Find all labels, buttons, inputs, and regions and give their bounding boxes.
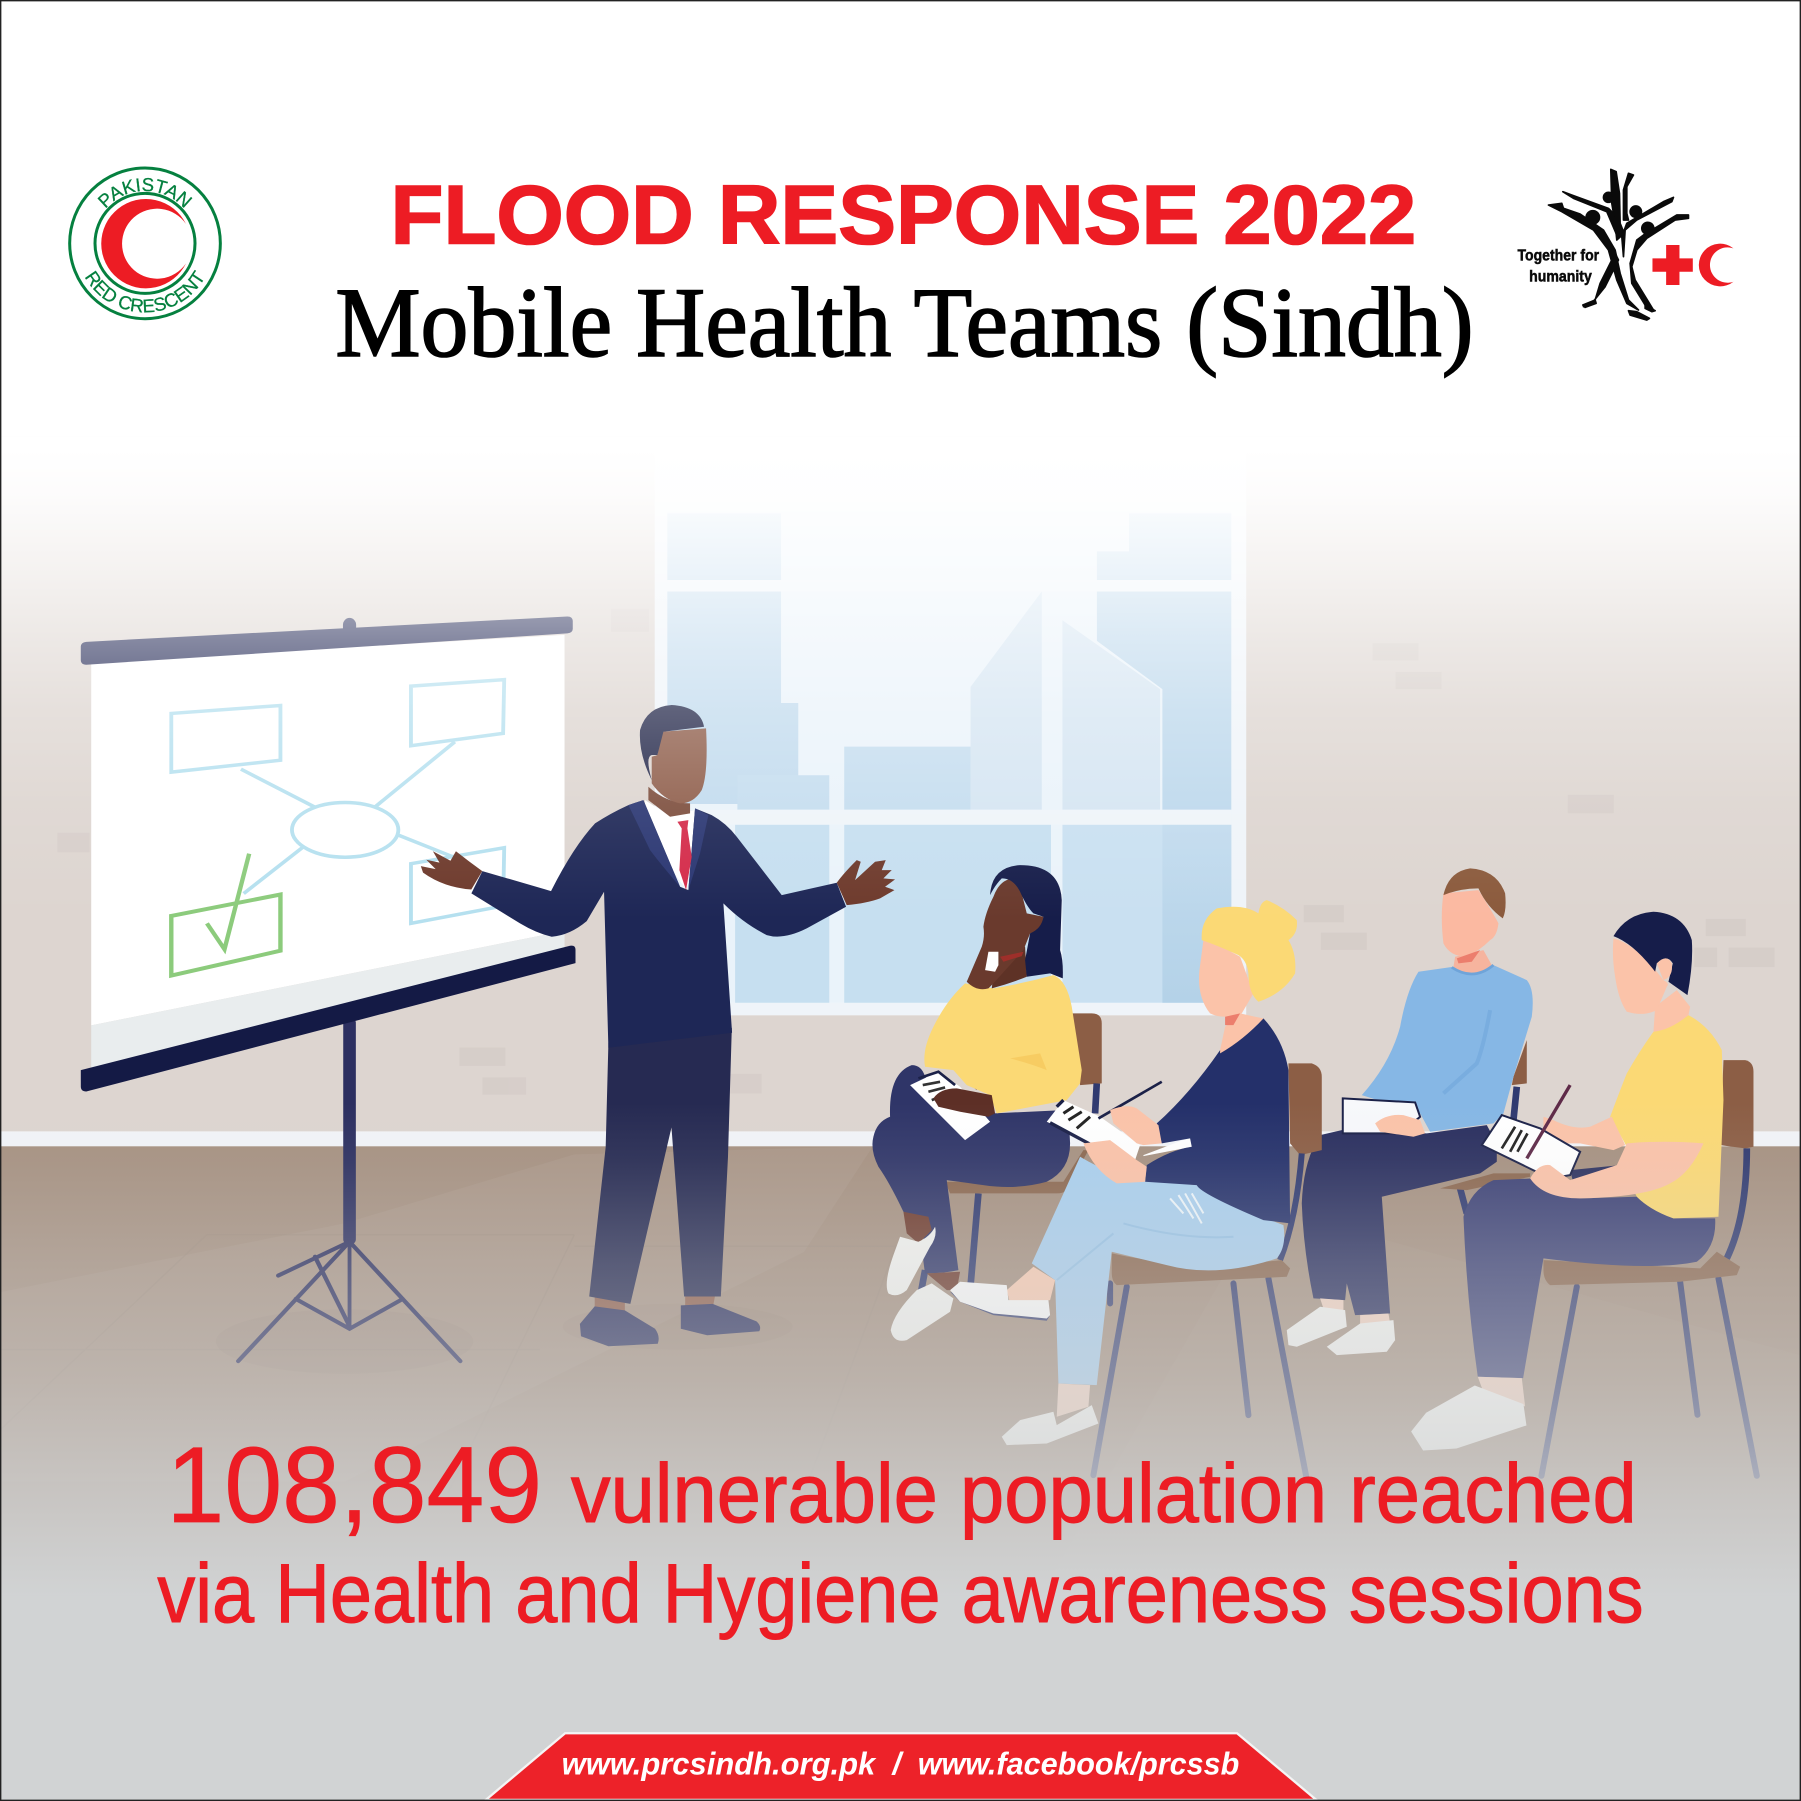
tie (677, 820, 692, 890)
subtitle: Mobile Health Teams (Sindh) (335, 267, 1474, 378)
jeans (1032, 1157, 1284, 1385)
arc text bottom: RED CRESCENT (85, 270, 204, 313)
seated woman with dark hair (872, 865, 1102, 1341)
tree of people (1548, 169, 1688, 320)
logo: Together for humanity (1517, 169, 1733, 320)
floor (0, 1146, 1801, 1801)
upper arm (1543, 1117, 1625, 1150)
tagline: Together for (1517, 248, 1599, 265)
statement line 2: via Health and Hygiene awareness sessions (157, 1546, 1644, 1640)
shoes (580, 1306, 659, 1346)
tablet (1343, 1098, 1420, 1133)
ankle (1478, 1377, 1525, 1406)
illustration: classroom scene (0, 436, 1801, 1801)
statement line 1: vulnerable population reached (571, 1446, 1637, 1540)
sleeve patch (1143, 1137, 1192, 1156)
left hand (421, 851, 482, 890)
lower hand (1083, 1140, 1147, 1183)
shoe (1411, 1385, 1526, 1450)
arc text top: PAKISTAN (98, 178, 192, 208)
crescent (101, 199, 186, 288)
face and hand at chin (967, 878, 1043, 989)
right hand (837, 860, 895, 905)
neck (1653, 990, 1690, 1032)
pencil (1527, 1085, 1570, 1158)
tee (1610, 1015, 1723, 1218)
face (1442, 890, 1498, 957)
lapels (628, 800, 708, 890)
chair (1288, 1063, 1322, 1155)
clipboard (1047, 1100, 1140, 1160)
clipboard (910, 1072, 990, 1140)
wall bricks (57, 609, 1775, 1095)
shoes (887, 1227, 936, 1295)
wall (0, 436, 1801, 1137)
ankles (1320, 1298, 1390, 1325)
ankles (903, 1212, 960, 1290)
sweater (1145, 1018, 1290, 1223)
logo: Pakistan Red Crescent (68, 166, 222, 320)
far thigh (1570, 1165, 1630, 1183)
footer link facebook: www.facebook/prcssb (918, 1747, 1239, 1782)
jeans rip (1170, 1193, 1203, 1223)
bottom grey band (0, 1595, 1801, 1801)
bottom fade overlay (0, 1103, 1801, 1801)
neck (1453, 950, 1492, 973)
top fade overlay (0, 436, 1801, 930)
big figure: 108,849 (167, 1424, 542, 1545)
upper hand (1110, 1106, 1162, 1145)
crossed shoe (950, 1282, 1050, 1318)
ankles (595, 1294, 715, 1314)
hair (1443, 868, 1506, 918)
face (1613, 938, 1668, 1014)
roller (343, 618, 356, 630)
jacket (471, 800, 846, 1048)
red crescent (1699, 244, 1733, 286)
seated man in yellow tee (1411, 912, 1757, 1476)
trousers (872, 1065, 1070, 1273)
footer separator: / (890, 1747, 904, 1782)
window (655, 442, 1246, 1015)
presenter upper body (471, 705, 895, 1048)
projector screen (81, 616, 576, 1361)
hair (1202, 900, 1297, 1002)
trousers (1302, 1125, 1497, 1315)
neck (992, 947, 1027, 988)
choker (1000, 952, 1023, 962)
chair (1512, 1040, 1527, 1085)
skirting board (0, 1131, 1801, 1146)
hair (990, 865, 1063, 978)
hair (1613, 912, 1692, 995)
clipboard (1482, 1115, 1580, 1178)
hair (640, 705, 704, 780)
shoes (1287, 1307, 1347, 1347)
face (1199, 940, 1253, 1017)
seated blonde woman (950, 900, 1322, 1476)
ear (1657, 958, 1672, 980)
foot skin (1007, 1267, 1055, 1303)
trousers (1463, 1178, 1715, 1378)
chair (1720, 1060, 1753, 1148)
footer link website: www.prcsindh.org.pk (562, 1747, 877, 1782)
chair (1072, 1013, 1102, 1085)
diagram (171, 680, 504, 923)
logo: Together for humanity: humanity (1529, 269, 1592, 286)
lower shoe (1002, 1405, 1098, 1445)
neck (1220, 1013, 1263, 1053)
trousers (589, 1028, 732, 1304)
bottom bar (81, 946, 576, 1092)
face (652, 728, 707, 803)
screen sheet (91, 635, 565, 1025)
white detail (985, 952, 998, 972)
footer ribbon (486, 1733, 1316, 1800)
presenter legs (421, 851, 760, 1346)
tripod (238, 1023, 460, 1361)
title: FLOOD RESPONSE 2022 (391, 168, 1416, 262)
neck (648, 787, 690, 817)
hand (933, 1088, 995, 1117)
sweater (1362, 965, 1533, 1132)
sweater (924, 975, 1082, 1113)
hand (1375, 1115, 1425, 1137)
crossed shoe sole (950, 1292, 1050, 1321)
red cross (1652, 245, 1693, 285)
lower ankle (1057, 1383, 1090, 1417)
green tick box (171, 854, 280, 976)
forearm and hand (1530, 1142, 1703, 1198)
pencil (1098, 1082, 1162, 1118)
seated man in blue sweater (1287, 868, 1533, 1355)
shirt (645, 800, 695, 890)
